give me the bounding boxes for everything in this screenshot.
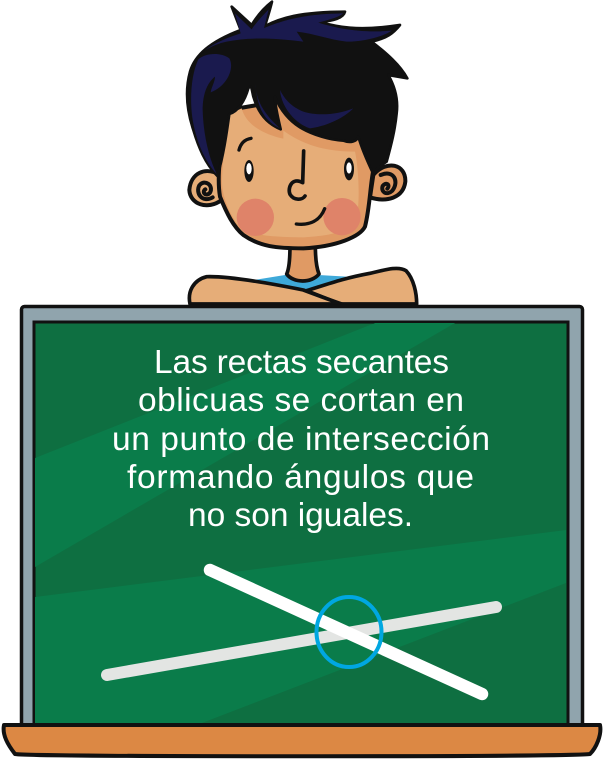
ear: left (189, 171, 222, 205)
character: boy with crossed arms (187, 2, 417, 304)
eyebrow (239, 138, 251, 150)
nose (289, 151, 305, 199)
hair highlight: centre lock (280, 90, 353, 128)
diagram: oblique secant lines (107, 570, 496, 694)
explanatory text: no son iguales. (188, 497, 413, 534)
eye: right (344, 158, 354, 180)
cheek: right (323, 198, 361, 235)
shirt collar (250, 275, 347, 293)
cheek: left (237, 199, 274, 236)
face (219, 100, 373, 248)
explanatory text: oblicuas se cortan en (138, 382, 464, 419)
arms (189, 268, 417, 304)
line: grey (107, 607, 496, 675)
face base (219, 100, 373, 248)
hair highlight: top (205, 9, 392, 50)
line: white (210, 570, 482, 694)
light band: lower (35, 530, 566, 723)
explanatory text: un punto de intersección (112, 421, 490, 458)
eye: left (244, 160, 254, 182)
chalk tray (4, 725, 600, 756)
explanatory text: formando ángulos que (127, 459, 474, 496)
hair (187, 2, 407, 176)
mouth (296, 209, 325, 224)
face highlight (222, 108, 359, 237)
left arm (189, 277, 342, 304)
hair highlight: fringe (255, 83, 280, 128)
ear: right (370, 165, 405, 199)
board background (34, 322, 568, 726)
right arm (307, 268, 417, 304)
light band: upper (35, 323, 455, 567)
chalkboard panel (34, 322, 568, 726)
hair highlight: left lock (191, 54, 231, 174)
hair mass (187, 2, 407, 176)
explanatory text: Las rectas secantes (154, 344, 449, 381)
intersection circle (316, 597, 382, 667)
neck (287, 245, 319, 281)
explanatory text (112, 344, 490, 534)
chalkboard frame (22, 306, 582, 736)
